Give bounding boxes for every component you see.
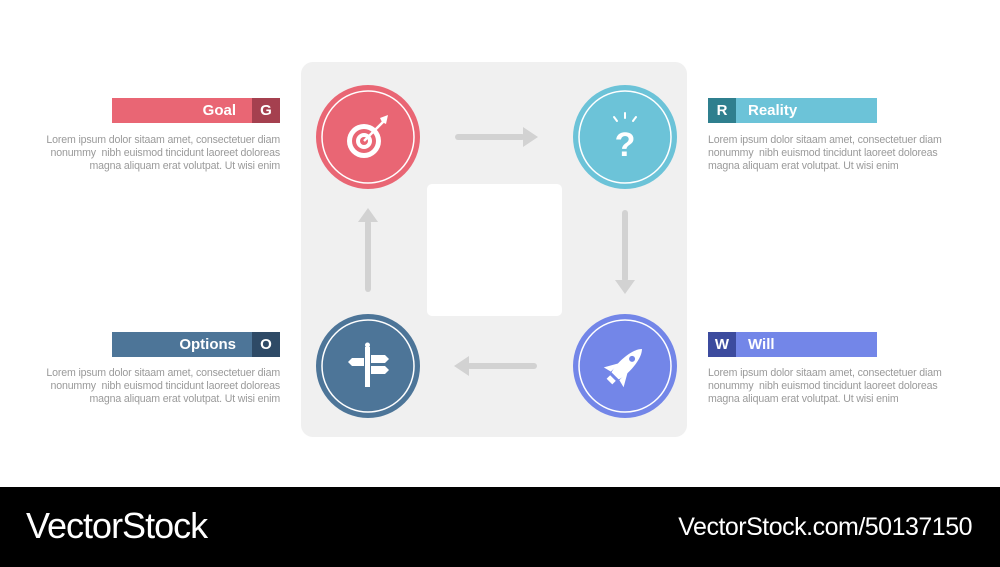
text: will description (708, 367, 942, 405)
text: options description (46, 367, 280, 405)
label: Goal: G (260, 102, 272, 119)
arrow: bottom (454, 356, 537, 376)
icon: will rocket (573, 314, 677, 418)
footer: brand: VectorStock (26, 505, 207, 546)
footer: url: VectorStock.com/50137150 (678, 513, 972, 541)
center box (427, 184, 562, 316)
arrow: left (358, 208, 378, 292)
icon: options signpost (316, 314, 420, 418)
text: reality description: nonummy nibh euismod tincidunt laoreet doloreas (708, 147, 938, 159)
text: reality description (708, 134, 942, 172)
icon: reality question: ? (615, 126, 635, 164)
label: Reality (708, 98, 877, 123)
text: will description: magna aliquam erat volutpat. Ut wisi enim (708, 393, 899, 405)
label: Goal: Goal (203, 102, 236, 119)
label: Reality: Reality (748, 102, 797, 119)
label: Options: Options (179, 336, 236, 353)
footer (0, 487, 1000, 567)
text: options description: nonummy nibh euismod tincidunt laoreet doloreas (50, 380, 280, 392)
text: goal description: nonummy nibh euismod tincidunt laoreet doloreas (50, 147, 280, 159)
arrow: right (615, 210, 635, 294)
label: Options: O (260, 336, 272, 353)
text: goal description: magna aliquam erat volutpat. Ut wisi enim (89, 160, 280, 172)
label: Reality: R (717, 102, 727, 119)
text: will description: nonummy nibh euismod tincidunt laoreet doloreas (708, 380, 938, 392)
text: goal description (46, 134, 280, 172)
label: Will: Will (748, 336, 775, 353)
text: options description: Lorem ipsum dolor sitaam amet, consectetuer diam (46, 367, 280, 379)
panel: background (301, 62, 687, 437)
text: reality description: Lorem ipsum dolor sitaam amet, consectetuer diam (708, 134, 942, 146)
text: reality description: magna aliquam erat volutpat. Ut wisi enim (708, 160, 899, 172)
arrow: top (455, 127, 538, 147)
text: goal description: Lorem ipsum dolor sitaam amet, consectetuer diam (46, 134, 280, 146)
label: Options (112, 332, 280, 357)
label: Will: W (715, 336, 729, 353)
icon: goal target (316, 85, 420, 189)
label: Goal (112, 98, 280, 123)
label: Will (708, 332, 877, 357)
text: will description: Lorem ipsum dolor sitaam amet, consectetuer diam (708, 367, 942, 379)
icon: reality question (573, 85, 677, 189)
text: options description: magna aliquam erat volutpat. Ut wisi enim (89, 393, 280, 405)
